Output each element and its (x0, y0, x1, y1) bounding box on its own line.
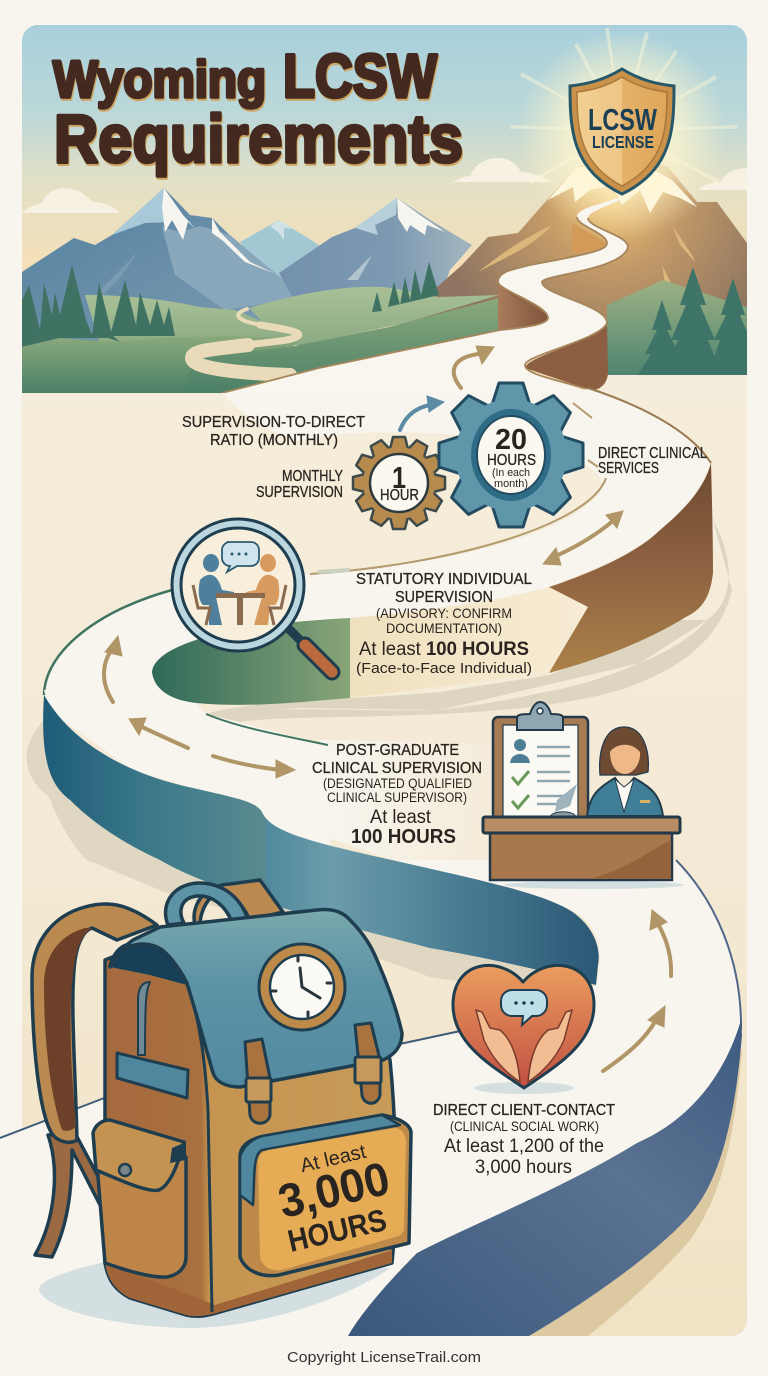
right hill (607, 280, 747, 375)
arrow: heart to road (603, 1006, 665, 1071)
road edge: summit right (525, 218, 628, 390)
lower strap (35, 1135, 100, 1257)
text: 20 hours: 20 (495, 424, 527, 456)
text: 1 hour: HOUR (380, 487, 419, 504)
top handle (194, 880, 283, 925)
icon: heart with caring hands (453, 965, 594, 1094)
trees: centre grove (372, 262, 439, 312)
title: Requirements (54, 101, 463, 177)
back hills (85, 295, 300, 345)
side pocket (98, 1133, 186, 1277)
clouds (22, 158, 747, 213)
title: LCSW (284, 44, 438, 112)
trail (192, 309, 299, 375)
label: monthly supervision: SUPERVISION (256, 484, 343, 501)
label: post-graduate clinical supervision: POST-GRADUATE (336, 742, 459, 759)
ribbon: navy (348, 1020, 742, 1336)
icon: clipboard (493, 702, 588, 819)
label: supervision-to-direct ratio: RATIO (MONTHLY) (210, 432, 338, 449)
label: direct clinical services (598, 445, 707, 477)
road edge: summit left (222, 217, 607, 393)
right buckle strap (355, 1023, 380, 1103)
flap interior (108, 942, 187, 985)
label: direct client-contact: DIRECT CLIENT-CONTACT (433, 1102, 615, 1119)
ribbon: green (152, 618, 350, 705)
label: statutory individual supervision (356, 571, 532, 677)
text: at least 3,000 hours (273, 1141, 394, 1259)
label: statutory individual supervision: (Face-to-Face Individual) (356, 660, 532, 677)
road wall right (525, 323, 608, 390)
side patch (117, 1053, 188, 1098)
title: Wyoming (54, 53, 267, 111)
text: 20 hours (487, 424, 536, 490)
icon: LCSW license shield (570, 69, 674, 194)
label: statutory individual supervision: STATUTORY INDIVIDUAL (356, 571, 532, 588)
ground shadow (39, 1262, 390, 1328)
teal ribbon shadow (27, 720, 596, 992)
text: 1 hour: 1 (392, 460, 406, 495)
text: 20 hours: HOURS (487, 452, 536, 469)
road: summit path into main road (222, 198, 628, 393)
label: post-graduate clinical supervision: At least (370, 807, 432, 828)
label: post-graduate clinical supervision: CLINICAL SUPERVISOR) (327, 790, 467, 805)
text: at least 3,000 hours: 3,000 (273, 1151, 394, 1228)
title: LCSW (283, 42, 437, 110)
label: post-graduate clinical supervision: (DESIGNATED QUALIFIED (323, 776, 472, 791)
summit mountain (405, 150, 747, 330)
road: bottom section (0, 860, 741, 1376)
title: Wyoming (53, 51, 266, 109)
label: direct client-contact: (CLINICAL SOCIAL WORK) (450, 1119, 599, 1134)
arrow: double direction right (543, 511, 623, 565)
arrow: left bend forward (213, 756, 295, 778)
front pocket (240, 1115, 411, 1276)
ribbon: teal (43, 695, 599, 985)
arrow: hero curve (454, 346, 494, 388)
label: supervision-to-direct ratio: SUPERVISION-TO-DIRECT (182, 414, 365, 431)
text: at least 3,000 hours: At least (298, 1141, 369, 1177)
icon: LCSW license shield: LICENSE (592, 132, 654, 152)
icon: LCSW license shield: LCSW (588, 102, 658, 137)
ribbon: beige strip (350, 587, 588, 698)
label: post-graduate clinical supervision: 100 HOURS (351, 826, 456, 848)
back strap (32, 904, 157, 1142)
label: supervision-to-direct ratio (182, 414, 365, 449)
arrow: right road up (650, 910, 671, 976)
ribbon shadow: bottom (525, 1050, 742, 1336)
inner loop (138, 982, 150, 1055)
icon: backpack (32, 880, 411, 1328)
label: statutory individual supervision: SUPERVISION (395, 589, 493, 606)
road edge: right (676, 860, 741, 1030)
label: direct client-contact (433, 1102, 615, 1178)
arrow: left bend up (104, 636, 122, 702)
text: 1 hour (380, 460, 419, 504)
sun rays (510, 28, 737, 240)
ribbon shadow (206, 520, 732, 722)
label: statutory individual supervision: DOCUMENTATION) (386, 620, 502, 636)
flap (110, 909, 402, 1087)
road: upper turn (44, 389, 711, 720)
title (53, 42, 464, 179)
label: direct client-contact: 3,000 hours (475, 1157, 572, 1178)
label: post-graduate clinical supervision (312, 742, 482, 848)
icon: magnifier with supervision meeting (172, 519, 332, 672)
road wall left (498, 282, 549, 332)
clock (259, 944, 345, 1030)
label: statutory individual supervision: At least 100 HOURS (359, 639, 529, 660)
arrow: gear to gear (400, 396, 444, 430)
summit snow (548, 165, 697, 213)
right blue mountain (279, 198, 472, 320)
label: statutory individual supervision: (ADVISORY: CONFIRM (376, 605, 512, 621)
panel: mountain hero scene (22, 25, 747, 393)
text: 20 hours: (In each (492, 467, 530, 479)
far peak (240, 220, 319, 300)
body (105, 930, 396, 1316)
icon: desk (483, 817, 684, 889)
label: monthly supervision (256, 468, 343, 501)
icon: small gear 1 hour (353, 437, 445, 529)
label: post-graduate clinical supervision: CLINICAL SUPERVISION (312, 760, 482, 777)
label: monthly supervision: MONTHLY (282, 468, 343, 485)
front pocket label (258, 1128, 406, 1270)
trees: left forest (22, 265, 175, 347)
icon: large gear 20 hours (439, 383, 583, 527)
label: direct clinical services: SERVICES (598, 460, 659, 477)
ribbon: brown (549, 463, 713, 673)
front hills (22, 336, 300, 393)
road edge: left (0, 1030, 465, 1138)
text: 20 hours: month) (494, 478, 528, 490)
copyright: Copyright LicenseTrail.com (287, 1349, 481, 1366)
label: direct clinical services: DIRECT CLINICAL (598, 445, 707, 462)
left mountain (22, 188, 304, 345)
left buckle strap (245, 1039, 270, 1123)
title: Requirements (55, 103, 464, 179)
trees: right forest (638, 267, 747, 375)
icon: advisor at desk (587, 727, 663, 816)
arrow: left bend back (129, 718, 188, 748)
road: lower left bend (44, 673, 330, 850)
label: direct client-contact: At least 1,200 of the (444, 1136, 604, 1157)
arrow: right bend (573, 403, 598, 467)
text: at least 3,000 hours: HOURS (284, 1202, 390, 1259)
